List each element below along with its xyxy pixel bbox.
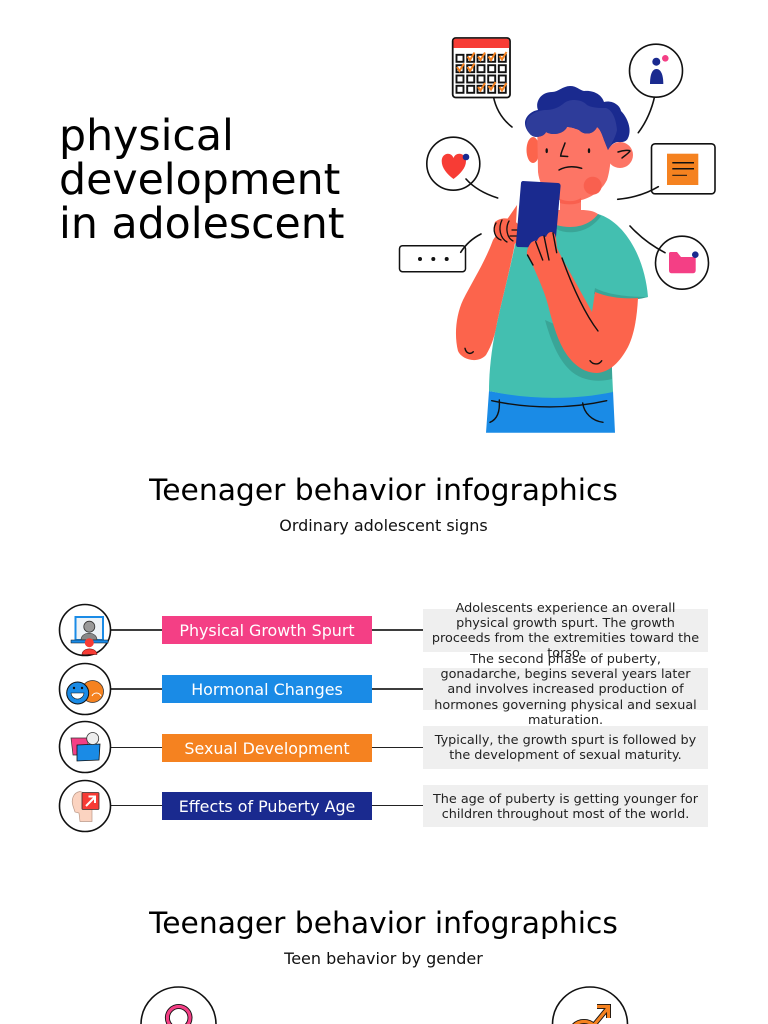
title: physical bbox=[59, 111, 234, 161]
phone bbox=[516, 181, 561, 248]
panel: row three description background bbox=[423, 726, 708, 768]
text: row one description: Adolescents experience an overall physical growth spurt. The growth proceeds from the extremities toward the torso. bbox=[432, 600, 699, 661]
icon: head with sign bbox=[60, 780, 110, 832]
panel: row two label: Hormonal Changes bbox=[191, 680, 343, 699]
subheading: section one: Ordinary adolescent signs bbox=[279, 516, 488, 535]
title: in adolescent bbox=[59, 199, 345, 249]
left arm bbox=[456, 205, 517, 360]
panel: row four label: Effects of Puberty Age bbox=[179, 797, 355, 816]
icon: person circle bbox=[630, 44, 682, 97]
right arm and hand bbox=[527, 232, 638, 373]
heading: section one: Teenager behavior infographics bbox=[149, 473, 618, 508]
text: row four description: The age of puberty is getting younger for children throughout most of the world. bbox=[433, 792, 698, 822]
neck bbox=[555, 195, 598, 227]
icon: calendar bbox=[453, 38, 510, 98]
subheading: section two: Teen behavior by gender bbox=[284, 949, 483, 968]
neck shadow bbox=[560, 198, 581, 204]
text: row two description: The second phase of puberty, gonadarche, begins several years later and involves increased production of hormones governing physical and sexual maturation. bbox=[434, 652, 697, 728]
shirt shadow bbox=[545, 320, 612, 381]
icon: typing bubble bbox=[400, 234, 481, 272]
hair bbox=[525, 86, 630, 150]
panel: row one label bbox=[162, 616, 372, 644]
title: development bbox=[59, 155, 340, 205]
cheek bbox=[584, 177, 602, 195]
illustration: teenager with phone bbox=[398, 37, 716, 433]
title bbox=[59, 111, 345, 249]
icon: video call bbox=[60, 604, 110, 656]
collar shadow bbox=[556, 214, 601, 232]
panel: row two label bbox=[162, 675, 372, 703]
panel: row three label: Sexual Development bbox=[184, 738, 350, 758]
icon: folder circle bbox=[630, 226, 708, 289]
icon: document box bbox=[618, 144, 715, 199]
icon: heart circle bbox=[427, 137, 498, 198]
icon: pillows bbox=[60, 722, 110, 772]
fist bbox=[494, 218, 518, 246]
panel: row three label bbox=[162, 734, 372, 762]
hair highlight bbox=[526, 100, 617, 150]
pants bbox=[486, 391, 615, 433]
panel: row two description background bbox=[423, 668, 708, 710]
panel: row one label: Physical Growth Spurt bbox=[179, 621, 355, 640]
face details bbox=[559, 143, 630, 170]
panel: row one description background bbox=[423, 609, 708, 652]
ears bbox=[526, 137, 540, 163]
shirt bbox=[489, 214, 648, 398]
panel: row four label bbox=[162, 792, 372, 820]
face bbox=[537, 118, 611, 202]
text: row three description: Typically, the growth spurt is followed by the development of sexual maturity. bbox=[435, 732, 696, 763]
panel: row four description background bbox=[423, 785, 708, 827]
icon: emotion faces bbox=[60, 664, 110, 714]
heading: section two: Teenager behavior infographics bbox=[149, 906, 618, 941]
